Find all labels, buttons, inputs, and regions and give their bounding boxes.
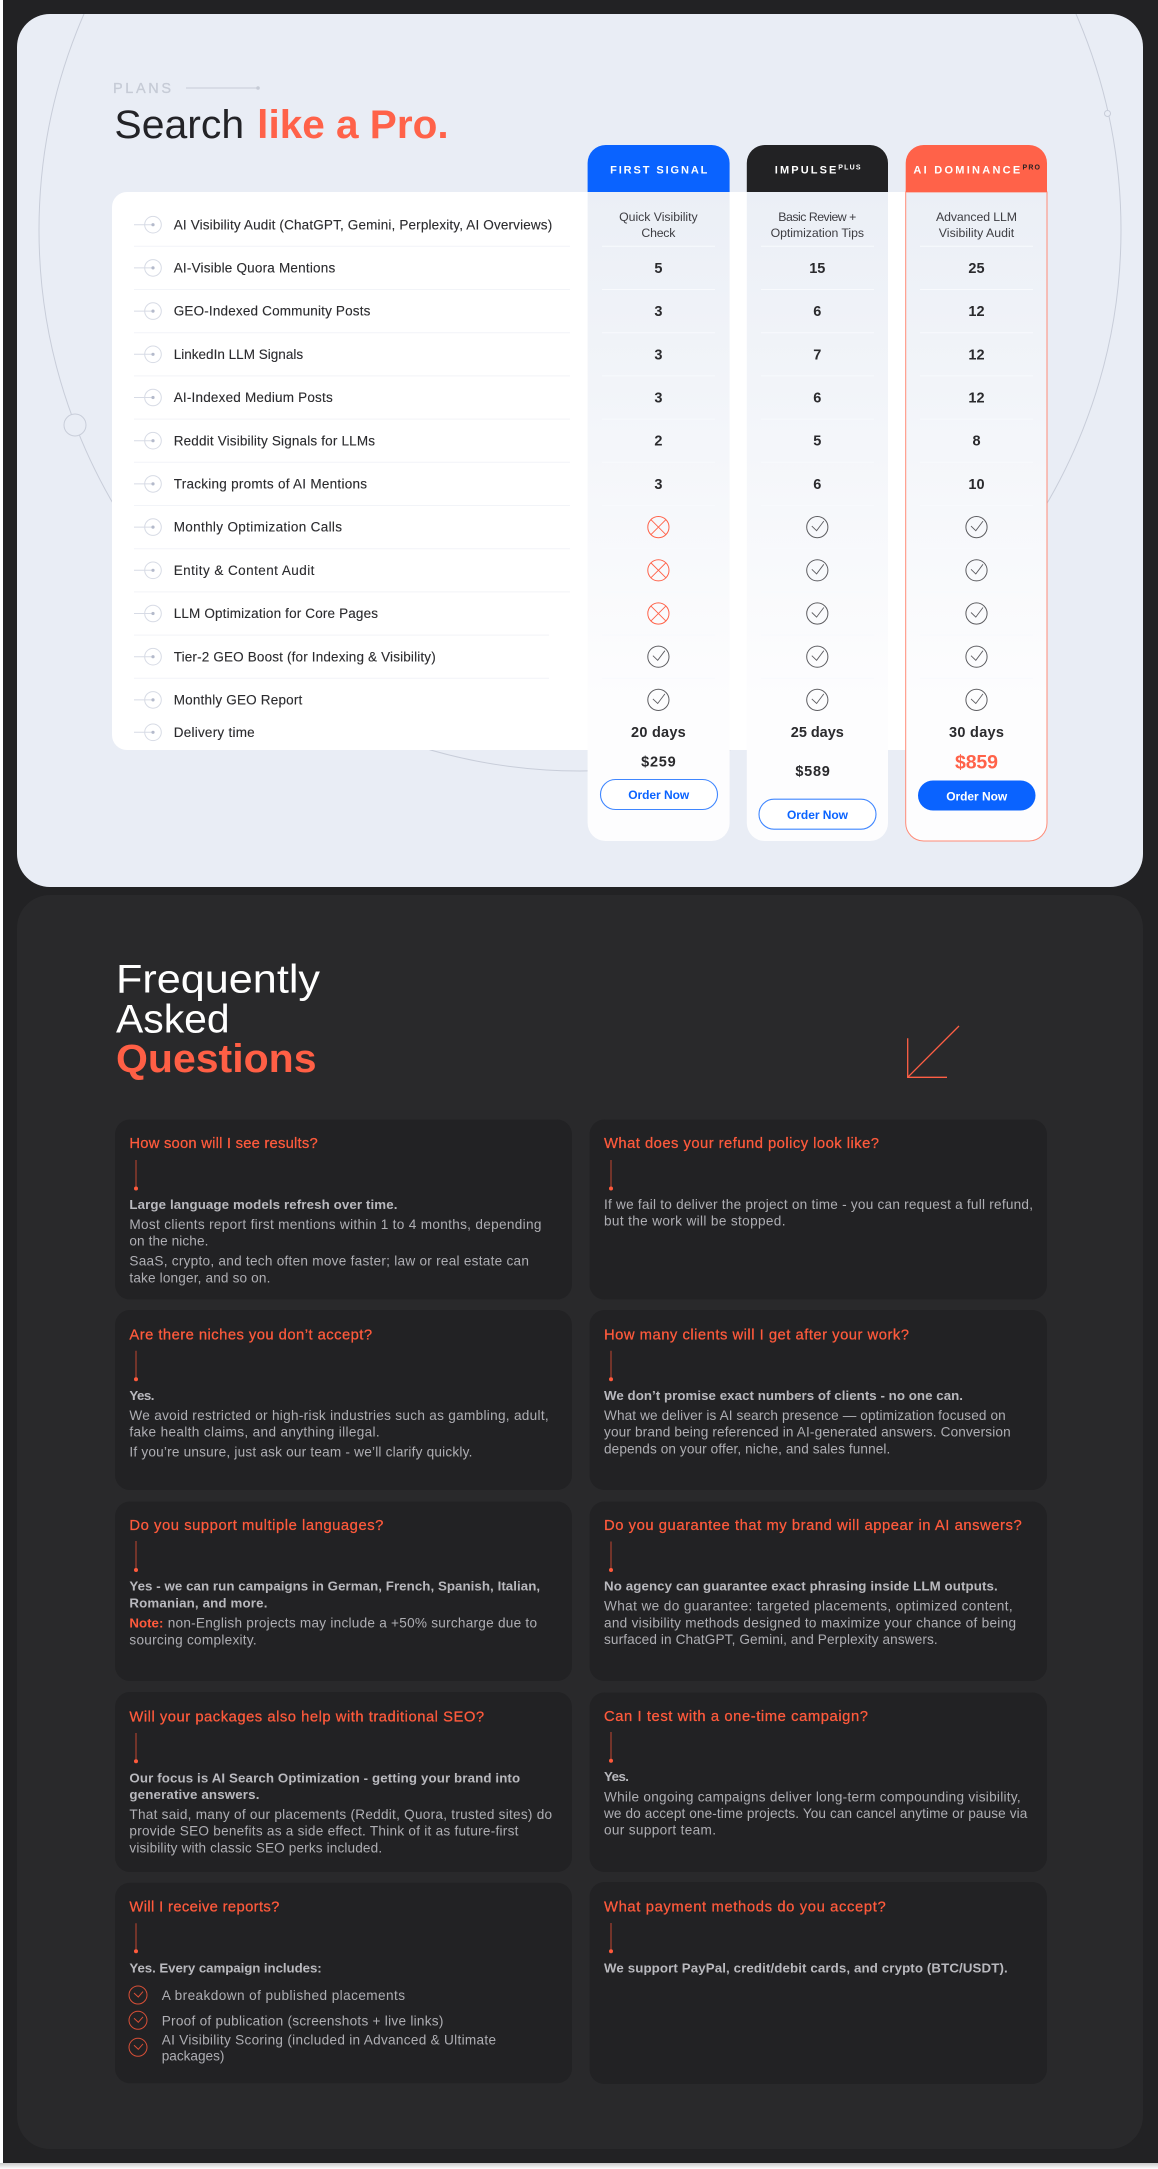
answer: Yes. Every campaign includes: — [129, 1960, 322, 1975]
feature row 2: AI-Visible Quora Mentions — [174, 260, 335, 276]
answer: Our focus is AI Search Optimization - getting your brand into — [129, 1770, 520, 1785]
price: $859 — [955, 752, 998, 774]
button: order now — [918, 780, 1036, 810]
plan header: ai dominance pro: AI DOMINANCE — [913, 164, 1020, 176]
answer: Most clients report first mentions within 1 to 4 months, depending — [129, 1217, 541, 1232]
answer: provide SEO benefits as a side effect. Think of it as future-first — [129, 1824, 519, 1839]
faq card: payment methods — [590, 1882, 1047, 2084]
feature row 6: Reddit Visibility Signals for LLMs — [174, 433, 375, 448]
eyebrow: plans — [113, 81, 260, 97]
arrow: down left — [908, 1026, 959, 1077]
answer: non-English projects may include a +50% surcharge due to — [168, 1616, 537, 1631]
heading: frequently asked questions: Frequently — [116, 958, 320, 1002]
plan values: 12 — [968, 304, 985, 320]
answer: While ongoing campaigns deliver long-term compounding visibility, — [604, 1789, 1021, 1804]
answer: your brand being referenced in AI-generated answers. Conversion — [604, 1425, 1011, 1440]
plan description: Basic Review + — [778, 210, 856, 224]
plan values: 7 — [813, 347, 821, 363]
question: Do you support multiple languages? — [129, 1518, 383, 1534]
plan column: impulse plus — [747, 145, 888, 841]
answer: That said, many of our placements (Reddit, Quora, trusted sites) do — [129, 1807, 552, 1822]
plan description: Quick Visibility — [619, 210, 698, 224]
faq card: how soon — [115, 1120, 572, 1300]
plan values: 6 — [813, 477, 821, 493]
button: order now: Order Now — [946, 790, 1008, 804]
connector arrow — [134, 1541, 138, 1572]
plan values: 3 — [654, 390, 662, 406]
button: order now — [600, 780, 718, 810]
question: Are there niches you don’t accept? — [129, 1327, 372, 1343]
connector arrow — [134, 1351, 138, 1381]
plan values: 3 — [654, 347, 662, 363]
feature row 10: LLM Optimization for Core Pages — [174, 606, 378, 621]
answer — [604, 1197, 1033, 1229]
answer: We avoid restricted or high-risk industries such as gambling, adult, — [129, 1408, 549, 1423]
connector arrow — [609, 1351, 613, 1381]
faq card: guarantee — [590, 1502, 1047, 1681]
feature row 11: Tier-2 GEO Boost (for Indexing & Visibility) — [174, 649, 436, 664]
answer: Romanian, and more. — [129, 1595, 267, 1610]
plan description — [936, 210, 1017, 240]
feature row 13: Delivery time — [174, 725, 255, 740]
plan values: 25 — [968, 261, 985, 277]
answer: SaaS, crypto, and tech often move faster; law or real estate can — [129, 1254, 529, 1269]
answer: Large language models refresh over time. — [129, 1197, 397, 1212]
answer: Note: — [129, 1616, 163, 1631]
plan values — [791, 261, 844, 741]
question: Can I test with a one-time campaign? — [604, 1709, 868, 1725]
plan values: 8 — [972, 434, 981, 450]
faq card: one-time campaign — [590, 1692, 1047, 1872]
heading: search like a pro: Search — [114, 103, 244, 147]
plan values: 15 — [809, 261, 825, 277]
heading: search like a pro: like a Pro. — [257, 103, 449, 147]
list item 3: packages) — [162, 2049, 224, 2064]
plan values: 5 — [813, 434, 821, 450]
question: How soon will I see results? — [129, 1136, 318, 1152]
plan header: ai dominance pro — [906, 145, 1047, 192]
answer: If we fail to deliver the project on time - you can request a full refund, — [604, 1197, 1033, 1212]
plan values: 20 days — [631, 725, 686, 741]
plan description — [771, 210, 864, 240]
question: Will I receive reports? — [129, 1900, 279, 1916]
page bottom shadow — [0, 2163, 1158, 2169]
plan values: 3 — [654, 477, 662, 493]
feature row 8: Monthly Optimization Calls — [174, 520, 342, 535]
answer: Yes. — [129, 1388, 154, 1403]
eyebrow: plans: PLANS — [113, 81, 171, 97]
answer: We support PayPal, credit/debit cards, and crypto (BTC/USDT). — [604, 1960, 1008, 1975]
plan values: 6 — [813, 390, 821, 406]
price: $259 — [641, 754, 676, 770]
panel: plans — [17, 0, 1143, 887]
answer — [604, 1388, 1011, 1456]
plan values: 3 — [654, 304, 662, 320]
feature row 4: LinkedIn LLM Signals — [174, 347, 303, 362]
faq card: traditional seo — [115, 1692, 572, 1872]
answer: If you’re unsure, just ask our team - we’ll clarify quickly. — [129, 1445, 472, 1460]
connector arrow — [609, 1923, 613, 1953]
heading: frequently asked questions — [116, 958, 320, 1081]
plan description: Check — [641, 226, 676, 240]
panel: feature list — [112, 192, 922, 750]
plan values: 12 — [968, 390, 985, 406]
connector arrow — [134, 1160, 138, 1190]
plan values — [631, 261, 686, 741]
button: order now: Order Now — [787, 808, 849, 822]
list item 1: A breakdown of published placements — [162, 1988, 405, 2003]
feature row 4 — [134, 346, 303, 363]
plan values: 12 — [968, 347, 985, 363]
answer: visibility with classic SEO perks included. — [129, 1840, 382, 1855]
connector arrow — [609, 1732, 613, 1763]
plan header: ai dominance pro: PRO — [1022, 164, 1041, 172]
question: Do you guarantee that my brand will appear in AI answers? — [604, 1518, 1022, 1534]
plan values: 25 days — [791, 725, 844, 741]
question: Will your packages also help with traditional SEO? — [129, 1710, 484, 1726]
heading: frequently asked questions: Questions — [116, 1037, 316, 1081]
panel: faq — [17, 895, 1143, 2149]
list item 3: AI Visibility Scoring (included in Advanced & Ultimate — [162, 2032, 496, 2047]
answer: but the work will be stopped. — [604, 1214, 786, 1229]
question: What does your refund policy look like? — [604, 1136, 879, 1152]
button: order now: Order Now — [628, 788, 690, 802]
answer: and visibility methods designed to maximize your chance of being — [604, 1615, 1016, 1630]
answer: No agency can guarantee exact phrasing inside LLM outputs. — [604, 1579, 998, 1594]
answer — [129, 1197, 541, 1285]
feature row 12 — [134, 692, 303, 708]
plan header: first signal — [588, 145, 730, 192]
answer: Yes - we can run campaigns in German, French, Spanish, Italian, — [129, 1579, 540, 1594]
answer: Yes. — [604, 1769, 629, 1784]
plan header: impulse plus — [747, 145, 888, 192]
question: How many clients will I get after your work? — [604, 1327, 909, 1343]
plan values: 6 — [813, 304, 821, 320]
answer: fake health claims, and anything illegal. — [129, 1425, 380, 1440]
list item 3 — [129, 2032, 496, 2064]
faq card: multiple languages — [115, 1502, 572, 1681]
feature row 3: GEO-Indexed Community Posts — [174, 304, 371, 319]
plan values: 30 days — [949, 725, 1004, 741]
answer: generative answers. — [129, 1787, 259, 1802]
faq card: refund policy — [590, 1120, 1047, 1300]
answer: on the niche. — [129, 1234, 208, 1249]
plan values: 5 — [654, 261, 662, 277]
plan description: Advanced LLM — [936, 210, 1017, 224]
answer: surfaced in ChatGPT, Gemini, and Perplexity answers. — [604, 1632, 938, 1647]
feature row 9: Entity & Content Audit — [174, 563, 315, 578]
price: $589 — [795, 764, 830, 780]
answer: take longer, and so on. — [129, 1270, 270, 1285]
feature row 5: AI-Indexed Medium Posts — [174, 390, 333, 405]
plan description: Optimization Tips — [771, 226, 864, 240]
plan description: Visibility Audit — [939, 226, 1015, 240]
decorative orbit circle — [39, 0, 1121, 771]
answer: We don’t promise exact numbers of clients - no one can. — [604, 1388, 963, 1403]
list item 2: Proof of publication (screenshots + live links) — [162, 2013, 443, 2028]
feature row 13 — [134, 724, 255, 741]
plan header: first signal: FIRST SIGNAL — [610, 164, 708, 176]
feature row 12: Monthly GEO Report — [174, 692, 303, 708]
answer — [129, 1579, 540, 1647]
answer — [129, 1388, 549, 1460]
answer: depends on your offer, niche, and sales funnel. — [604, 1441, 890, 1456]
connector arrow — [134, 1733, 138, 1763]
question: What payment methods do you accept? — [604, 1900, 886, 1916]
plan values: 2 — [654, 434, 662, 450]
faq card: niches — [115, 1310, 572, 1490]
heading: frequently asked questions: Asked — [116, 998, 230, 1042]
plan header: impulse plus: PLUS — [838, 164, 861, 172]
plan header: impulse plus: IMPULSE — [775, 164, 836, 176]
button: order now — [759, 799, 876, 829]
answer: What we do guarantee: targeted placements, optimized content, — [604, 1599, 1013, 1614]
answer: What we deliver is AI search presence — optimization focused on — [604, 1408, 1006, 1423]
heading: search like a pro — [114, 103, 449, 147]
connector arrow — [609, 1542, 613, 1572]
plan values: 10 — [968, 477, 985, 493]
plan values — [949, 261, 1004, 741]
faq card: reports — [115, 1883, 572, 2083]
answer — [129, 1770, 552, 1855]
plan column: first signal — [588, 145, 730, 841]
answer — [603, 1769, 1028, 1838]
answer: sourcing complexity. — [129, 1632, 257, 1647]
feature row 7: Tracking promts of AI Mentions — [174, 476, 367, 492]
answer: our support team. — [604, 1823, 716, 1838]
connector arrow — [609, 1160, 613, 1190]
connector arrow — [134, 1923, 138, 1953]
feature row 1: AI Visibility Audit (ChatGPT, Gemini, Perplexity, AI Overviews) — [174, 217, 552, 232]
plan column: ai dominance pro — [906, 145, 1047, 841]
plan description — [619, 210, 698, 240]
answer — [604, 1579, 1016, 1647]
answer: we do accept one-time projects. You can cancel anytime or pause via — [603, 1806, 1028, 1821]
faq card: how many clients — [590, 1310, 1047, 1490]
